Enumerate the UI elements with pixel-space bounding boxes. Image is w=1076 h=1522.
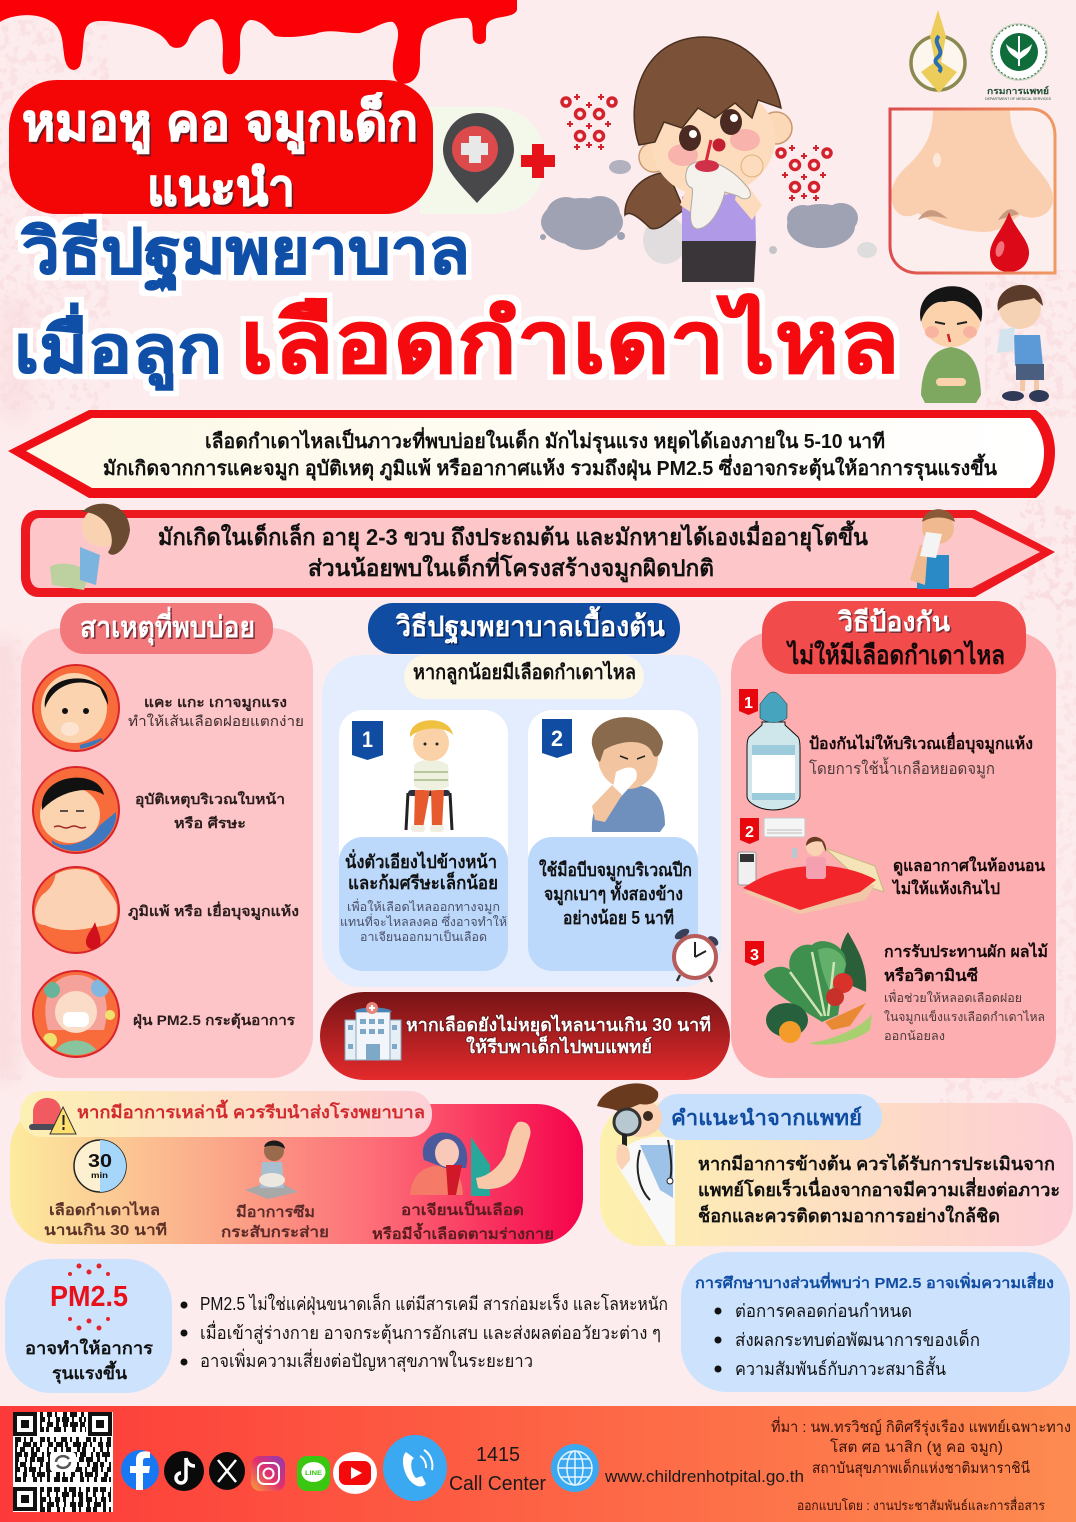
icon: portable air unit — [738, 852, 756, 885]
prevention 3: vegetables and vitamin C: หรือวิตามินซี — [884, 966, 978, 985]
prevention 3: vegetables and vitamin C: การรับประทานผัก ผลไม้ — [884, 942, 1048, 961]
main heading line 1: วิธีปฐมพยาบาล — [21, 218, 470, 292]
prevention 2: room air: ดูแลอากาศในห้องนอน — [893, 856, 1045, 877]
callout: see a doctor — [320, 992, 730, 1080]
sign: bleeding over 30 minutes: 30 — [88, 1151, 112, 1171]
illustration: vegetables — [764, 932, 872, 1045]
cause 1: nose picking: แคะ แกะ เกาจมูกแรง — [144, 694, 287, 711]
badge 3 — [745, 941, 764, 966]
illustration: girl with nosebleed — [625, 37, 792, 282]
callout: see a doctor: หากเลือดยังไม่หยุดไหลนานเกิน 30 นาที — [406, 1014, 711, 1037]
heading: prevention — [762, 601, 1026, 674]
panel: doctor's advice: แพทย์โดยเร็วเนื่องจากอาจมีความเสี่ยงต่อภาวะ — [698, 1177, 1060, 1200]
list: PM2.5 facts — [180, 1292, 668, 1372]
icon: Facebook — [121, 1450, 159, 1490]
warning header: หากมีอาการเหล่านี้ ควรรีบนำส่งโรงพยาบาล — [77, 1099, 425, 1122]
illustration: boy in blue with tissue — [997, 285, 1049, 402]
illustration: boy in green with nosebleed — [920, 286, 982, 403]
panel: prevention — [731, 601, 1056, 1078]
cause 1: nose picking — [33, 665, 304, 752]
step 1 badge: 1 — [362, 727, 373, 752]
icon: phone — [383, 1435, 447, 1501]
banner: who it affects: มักเกิดในเด็กเล็ก อายุ 2-3 ขวบ ถึงประถมต้น และมักหายได้เองเมื่ออายุโตขึ้น — [158, 520, 868, 552]
logo: Department of Medical Services: DEPARTMENT OF MEDICAL SERVICES — [985, 97, 1052, 101]
icon: YouTube — [333, 1452, 377, 1494]
background blood splatter — [0, 20, 1076, 1103]
panel: doctor's advice — [597, 1083, 1073, 1246]
illustration: woman vomiting blood and bruised arm — [410, 1122, 530, 1196]
heading: prevention: วิธีป้องกัน — [837, 607, 951, 637]
badge 1 — [739, 689, 758, 715]
banner: what nosebleed is — [8, 410, 1055, 498]
panel: emergency signs — [10, 1091, 583, 1244]
sub-heading: หากลูกน้อยมีเลือดกำเดาไหล — [413, 660, 636, 686]
pin pill background — [420, 107, 545, 214]
sign: drowsy and restless: กระสับกระส่าย — [221, 1224, 329, 1241]
sign: drowsy and restless: มีอาการซึม — [236, 1203, 315, 1221]
cause 2: face injury: หรือ ศีรษะ — [174, 815, 246, 831]
step 2 card: จมูกเบาๆ ทั้งสองข้าง — [544, 880, 683, 906]
prevention 1: saline drops — [739, 689, 1033, 810]
logo: Royal College of Otolaryngologists crest — [911, 10, 965, 93]
step 1 card: อาเจียนออกมาเป็นเลือด — [360, 929, 487, 944]
icon: Instagram — [251, 1456, 285, 1491]
step 2 card — [528, 710, 698, 971]
icon: LINE: LINE — [305, 1471, 322, 1477]
sign: bleeding over 30 minutes: min — [91, 1171, 108, 1180]
sign: bleeding over 30 minutes: นานเกิน 30 นาที — [44, 1221, 167, 1239]
panel: study findings: ต่อการคลอดก่อนกำหนด — [735, 1301, 912, 1321]
icon: saline bottle — [747, 692, 800, 810]
main heading line 2: เลือดกำเดาไหล — [240, 293, 900, 391]
illustration: boy blowing nose — [910, 509, 955, 589]
step 2 badge: 2 — [551, 726, 563, 751]
illustration: seated child — [406, 720, 453, 832]
step 2 badge — [542, 719, 572, 758]
QR code — [13, 1412, 113, 1512]
website: www.childrenhotpital.go.th — [604, 1467, 804, 1486]
heading: causes: สาเหตุที่พบบ่อย — [80, 606, 255, 645]
illustration: child in bed — [743, 837, 884, 914]
title badge: แนะนำ — [147, 160, 295, 216]
banner: who it affects — [21, 504, 1055, 597]
panel: first aid — [322, 603, 721, 987]
smoke clouds — [540, 160, 877, 264]
icon: TikTok — [164, 1451, 204, 1491]
icon: red plus — [521, 144, 555, 178]
cause 1: nose picking: ทำให้เส้นเลือดฝอยแตกง่าย — [128, 713, 304, 729]
blood drips — [0, 0, 517, 84]
cause 3: allergy dry nose: ภูมิแพ้ หรือ เยื่อบุจมูกแห้ง — [128, 901, 299, 920]
icon: PM2.5 with dots — [50, 1264, 128, 1330]
sign: bleeding over 30 minutes — [44, 1140, 167, 1239]
step 1 card: นั่งตัวเอียงไปข้างหน้า — [345, 849, 497, 872]
sub-heading — [404, 655, 644, 699]
icon: alarm and warning triangle — [29, 1098, 76, 1134]
panel: study findings: ความสัมพันธ์กับภาวะสมาธิสั้น — [735, 1356, 946, 1379]
step 1 card: แทนที่จะไหลลงคอ ซึ่งอาจทำให้ — [340, 913, 507, 929]
main heading line 2: เมื่อลูก — [14, 302, 222, 391]
icon: X — [209, 1452, 245, 1490]
icon: hospital — [345, 1002, 401, 1060]
banner: what nosebleed is: เลือดกำเดาไหลเป็นภาวะที่พบบ่อยในเด็ก มักไม่รุนแรง หยุดได้เองภายใน 5-10 นาที — [205, 426, 885, 454]
badge 1: 1 — [744, 695, 753, 712]
badge 3: 3 — [750, 947, 759, 964]
heading: doctor's advice — [655, 1094, 882, 1140]
logo: Department of Medical Services: กรมการแพทย์ — [987, 85, 1049, 96]
banner: who it affects: ส่วนน้อยพบในเด็กที่โครงสร้างจมูกผิดปกติ — [308, 551, 714, 583]
illustration: doctor with magnifier — [597, 1083, 675, 1245]
call center number — [449, 1444, 546, 1495]
step 1 card — [339, 710, 508, 971]
panel: common causes — [21, 603, 313, 1078]
icon: LINE — [297, 1456, 330, 1491]
step 1 card: และก้มศรีษะเล็กน้อย — [348, 871, 498, 893]
source credit: ออกแบบโดย : งานประชาสัมพันธ์และการสื่อสาร — [797, 1497, 1045, 1513]
panel: doctor's advice: หากมีอาการข้างต้น ควรได้รับการประเมินจาก — [698, 1153, 1055, 1174]
main heading line 2 — [14, 293, 900, 391]
illustration: child pinching nose — [592, 717, 665, 832]
source credit: ที่มา : นพ.ทรวิชญ์ กิติศรีรุ่งเรือง แพทย์เฉพาะทาง — [771, 1416, 1071, 1437]
step 1 card: เพื่อให้เลือดไหลออกทางจมูก — [347, 898, 500, 915]
heading: doctor's advice: คำแนะนำจากแพทย์ — [671, 1106, 862, 1130]
icon: PM2.5 with dots: PM2.5 — [50, 1281, 128, 1313]
sign: drowsy and restless — [221, 1140, 329, 1241]
callout: see a doctor: ให้รีบพาเด็กไปพบแพทย์ — [466, 1035, 652, 1057]
icon: globe — [551, 1444, 599, 1492]
panel: study findings: ส่งผลกระทบต่อพัฒนาการของเด็ก — [735, 1328, 980, 1350]
heading: first aid: วิธีปฐมพยาบาลเบื้องต้น — [395, 605, 665, 645]
panel: study findings: การศึกษาบางส่วนที่พบว่า PM2.5 อาจเพิ่มความเสี่ยง — [695, 1272, 1054, 1292]
icon: air conditioner — [764, 818, 805, 837]
call center number: 1415 — [476, 1444, 520, 1466]
prevention 3: vegetables and vitamin C: ออกน้อยลง — [884, 1029, 945, 1043]
prevention 1: saline drops: ป้องกันไม่ให้บริเวณเยื่อบุจมูกแห้ง — [809, 732, 1033, 755]
prevention 2: room air: ไม่ให้แห้งเกินไป — [891, 879, 1000, 898]
list: PM2.5 facts: PM2.5 ไม่ใช่แค่ฝุ่นขนาดเล็ก แต่มีสารเคมี สารก่อมะเร็ง และโลหะหนัก — [200, 1292, 668, 1315]
cause 4: PM2.5 dust: ฝุ่น PM2.5 กระตุ้นอาการ — [133, 1012, 296, 1029]
cause 2: face injury: อุบัติเหตุบริเวณใบหน้า — [135, 790, 285, 808]
call center number: Call Center — [449, 1473, 546, 1495]
title badge: หมอหู คอ จมูกเด็ก — [22, 92, 418, 154]
prevention 2: room air — [738, 818, 1045, 914]
illustration: drowsy child — [245, 1140, 298, 1199]
step 2 card: อย่างน้อย 5 นาที — [563, 908, 674, 928]
badge 2 — [740, 818, 759, 844]
title badge — [9, 80, 433, 216]
panel: PM2.5 badge: รุนแรงขึ้น — [52, 1360, 127, 1384]
heading: causes — [60, 603, 273, 654]
icon: alarm clock — [673, 927, 720, 982]
sign: bleeding over 30 minutes: เลือดกำเดาไหล — [49, 1200, 160, 1219]
banner: what nosebleed is: มักเกิดจากการแคะจมูก อุบัติเหตุ ภูมิแพ้ หรืออากาศแห้ง รวมถึงฝุ่น PM2.5 ซึ่งอาจกระตุ้นให้อาการรุนแรงขึ้น — [103, 453, 997, 482]
prevention 3: vegetables and vitamin C — [745, 932, 1048, 1045]
prevention 3: vegetables and vitamin C: เพื่อช่วยให้หลอดเลือดฝอย — [884, 989, 1022, 1005]
prevention 3: vegetables and vitamin C: ในจมูกแข็งแรงเลือดกำเดาไหล — [884, 1009, 1045, 1025]
prevention 1: saline drops: โดยการใช้น้ำเกลือหยอดจมูก — [809, 757, 995, 779]
footer — [0, 1406, 1076, 1522]
heading: first aid — [368, 603, 680, 654]
panel: PM2.5 badge — [5, 1259, 172, 1393]
sign: vomiting blood or bruises — [372, 1122, 554, 1243]
badge 2: 2 — [745, 824, 754, 841]
illustration: falling child — [50, 504, 130, 590]
panel: doctor's advice: ช็อกและควรติดตามอาการอย่างใกล้ชิด — [698, 1204, 1000, 1226]
cause 2: face injury — [33, 767, 285, 860]
sign: vomiting blood or bruises: หรือมีจ้ำเลือดตามร่างกาย — [372, 1222, 554, 1243]
logo: Department of Medical Services — [985, 24, 1052, 101]
panel: PM2.5 badge: อาจทำให้อาการ — [25, 1338, 154, 1358]
source credit: สถาบันสุขภาพเด็กแห่งชาติมหาราชินี — [812, 1458, 1030, 1478]
step 1 badge — [352, 721, 383, 760]
panel: study findings — [681, 1252, 1070, 1392]
source credit — [771, 1416, 1071, 1513]
list: PM2.5 facts: อาจเพิ่มความเสี่ยงต่อปัญหาสุขภาพในระยะยาว — [200, 1348, 533, 1372]
cause 3: allergy dry nose — [33, 867, 299, 953]
icon: location pin with cross — [443, 113, 514, 203]
step 2 card: ใช้มือบีบจมูกบริเวณปีก — [539, 859, 692, 882]
heading: prevention: ไม่ให้มีเลือดกำเดาไหล — [785, 639, 1005, 670]
warning header — [20, 1091, 432, 1137]
list: PM2.5 facts: เมื่อเข้าสู่ร่างกาย อาจกระตุ้นการอักเสบ และส่งผลต่ออวัยวะต่าง ๆ — [200, 1320, 661, 1344]
icon: red cross clusters — [562, 94, 831, 201]
illustration: nose with blood drop — [890, 109, 1055, 273]
source credit: โสต ศอ นาสิก (หู คอ จมูก) — [830, 1438, 1003, 1456]
sign: vomiting blood or bruises: อาเจียนเป็นเลือด — [401, 1200, 524, 1219]
cause 4: PM2.5 dust — [33, 971, 296, 1060]
